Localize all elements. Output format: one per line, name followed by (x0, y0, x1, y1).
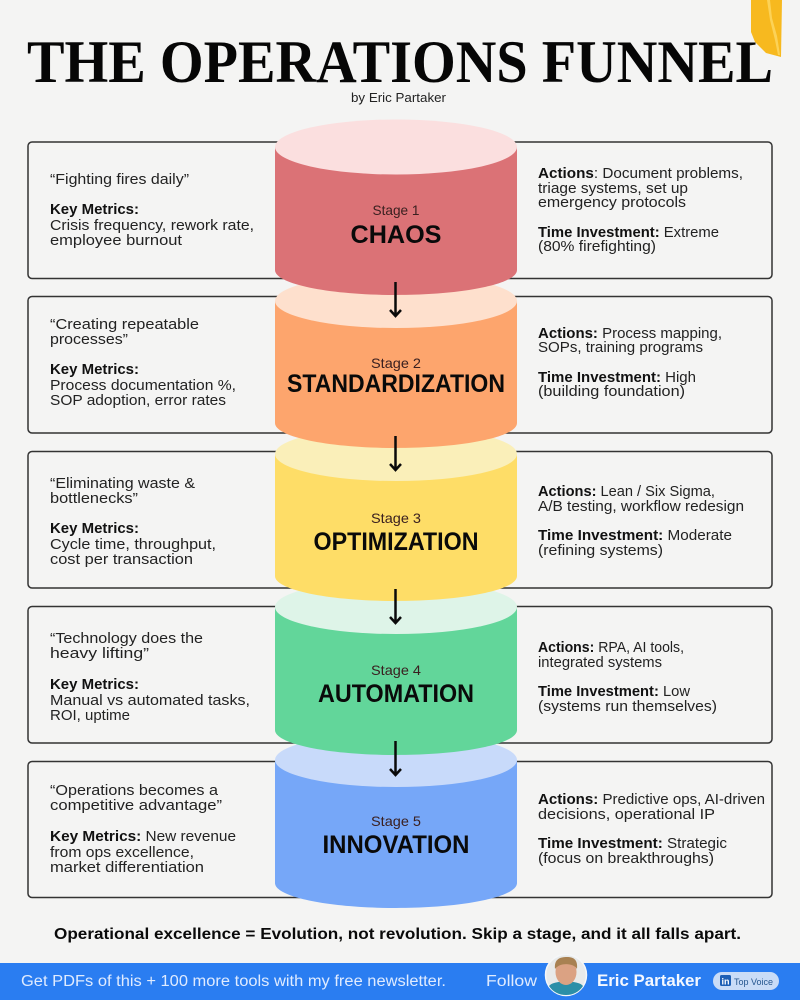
icon: author portrait (546, 954, 586, 996)
decorative tape (751, 0, 782, 57)
panel: stage 1 details (28, 142, 772, 278)
stage 1 quote and metrics: Key Metrics: (50, 201, 139, 218)
cylinder: stage 2 standardization (275, 274, 517, 448)
stage 5 actions and time: decisions, operational IP (538, 806, 715, 823)
newsletter text: Get PDFs of this + 100 more tools with my free newsletter. (21, 973, 446, 990)
stage 4 quote and metrics: ROI, uptime (50, 707, 130, 724)
panel: stage 4 details (28, 606, 772, 743)
panel: stage 2 details (28, 296, 772, 433)
stage 2 actions and time: SOPs, training programs (538, 339, 703, 356)
tagline: Operational excellence = Evolution, not revolution. Skip a stage, and it all falls apart. (54, 926, 741, 943)
stage 2 quote and metrics: processes” (50, 331, 128, 348)
stage 2 quote and metrics: “Creating repeatable (50, 316, 199, 333)
cylinder: stage 1 chaos: CHAOS (350, 221, 442, 249)
stage 1 actions and time: (80% firefighting) (538, 238, 656, 255)
stage 5 quote and metrics: competitive advantage” (50, 797, 222, 814)
cylinder: stage 5 innovation: INNOVATION (322, 831, 470, 859)
stage 3 actions and time: Time Investment: Moderate (538, 527, 732, 544)
cylinder: stage 5 innovation (275, 733, 517, 908)
cylinder: stage 3 optimization: Stage 3 (371, 510, 421, 526)
stage 3 quote and metrics: bottlenecks” (50, 490, 138, 507)
stage 5 quote and metrics: market differentiation (50, 859, 204, 876)
arrow: stage 4 to 5 (390, 741, 401, 775)
stage 2 quote and metrics (50, 316, 236, 409)
byline: by Eric Partaker (351, 91, 446, 105)
stage 1 quote and metrics (50, 171, 254, 249)
stage 3 quote and metrics: “Eliminating waste & (50, 475, 195, 492)
cylinder: stage 4 automation (275, 580, 517, 755)
stage 3 actions and time: Actions: Lean / Six Sigma, (538, 483, 715, 500)
stage 2 actions and time: Time Investment: High (538, 369, 696, 386)
stage 5 actions and time: Time Investment: Strategic (538, 835, 727, 852)
cylinder: stage 5 innovation: Stage 5 (371, 813, 421, 829)
arrow: stage 3 to 4 (390, 589, 401, 623)
stage 5 actions and time: (focus on breakthroughs) (538, 850, 714, 867)
stage 4 actions and time: integrated systems (538, 654, 662, 671)
stage 1 actions and time: emergency protocols (538, 194, 686, 211)
stage 1 actions and time: triage systems, set up (538, 180, 688, 197)
stage 3 actions and time: A/B testing, workflow redesign (538, 498, 744, 515)
stage 5 quote and metrics (50, 782, 236, 876)
stage 3 actions and time (538, 483, 744, 559)
stage 2 actions and time: Actions: Process mapping, (538, 325, 722, 342)
stage 1 quote and metrics: “Fighting fires daily” (50, 171, 189, 188)
stage 1 quote and metrics: Crisis frequency, rework rate, (50, 217, 254, 234)
cylinder: stage 4 automation: Stage 4 (371, 662, 421, 678)
stage 5 quote and metrics: from ops excellence, (50, 844, 194, 861)
stage 3 quote and metrics: Key Metrics: (50, 520, 139, 537)
stage 4 actions and time: Actions: RPA, AI tools, (538, 639, 684, 656)
stage 3 quote and metrics: Cycle time, throughput, (50, 536, 216, 553)
stage 5 quote and metrics: “Operations becomes a (50, 782, 219, 799)
stage 3 actions and time: (refining systems) (538, 542, 663, 559)
cylinder: stage 2 standardization: Stage 2 (371, 355, 421, 371)
stage 4 quote and metrics: heavy lifting” (50, 645, 149, 662)
stage 3 quote and metrics (50, 475, 216, 568)
stage 5 quote and metrics: Key Metrics: New revenue (50, 828, 236, 845)
stage 5 actions and time (538, 791, 765, 867)
stage 2 quote and metrics: Process documentation %, (50, 377, 236, 394)
stage 2 quote and metrics: SOP adoption, error rates (50, 392, 226, 409)
author name: Eric Partaker (597, 972, 702, 990)
badge: top voice (713, 972, 779, 990)
cylinder: stage 3 optimization (275, 427, 517, 601)
stage 4 quote and metrics: “Technology does the (50, 630, 203, 647)
stage 4 actions and time: (systems run themselves) (538, 698, 717, 715)
arrow: stage 2 to 3 (390, 436, 401, 470)
arrow: stage 1 to 2 (390, 282, 401, 316)
panel: stage 3 details (28, 452, 772, 588)
follow label: Follow (486, 973, 538, 990)
cylinder: stage 1 chaos: Stage 1 (372, 202, 420, 218)
stage 4 quote and metrics (50, 630, 250, 724)
stage 1 quote and metrics: employee burnout (50, 232, 183, 249)
panel: stage 5 details (28, 762, 772, 898)
badge: top voice: Top Voice (734, 977, 773, 988)
cylinder: stage 1 chaos (275, 120, 517, 295)
stage 4 quote and metrics: Manual vs automated tasks, (50, 692, 250, 709)
stage 1 actions and time: Actions: Document problems, (538, 165, 743, 182)
cylinder: stage 2 standardization: STANDARDIZATION (287, 370, 505, 398)
stage 3 quote and metrics: cost per transaction (50, 551, 193, 568)
cylinder: stage 4 automation: AUTOMATION (318, 680, 474, 708)
stage 5 actions and time: Actions: Predictive ops, AI-driven (538, 791, 765, 808)
stage 2 actions and time (538, 325, 722, 400)
badge: top voice: in (722, 976, 730, 986)
footer banner (0, 954, 800, 1000)
cylinder: stage 3 optimization: OPTIMIZATION (314, 528, 478, 556)
stage 4 actions and time (538, 639, 717, 715)
stage 4 actions and time: Time Investment: Low (538, 683, 690, 700)
stage 2 quote and metrics: Key Metrics: (50, 361, 139, 378)
stage 1 actions and time (538, 165, 743, 255)
stage 2 actions and time: (building foundation) (538, 383, 685, 400)
stage 4 quote and metrics: Key Metrics: (50, 676, 139, 693)
stage 1 actions and time: Time Investment: Extreme (538, 224, 719, 241)
title: THE OPERATIONS FUNNEL (27, 29, 773, 95)
